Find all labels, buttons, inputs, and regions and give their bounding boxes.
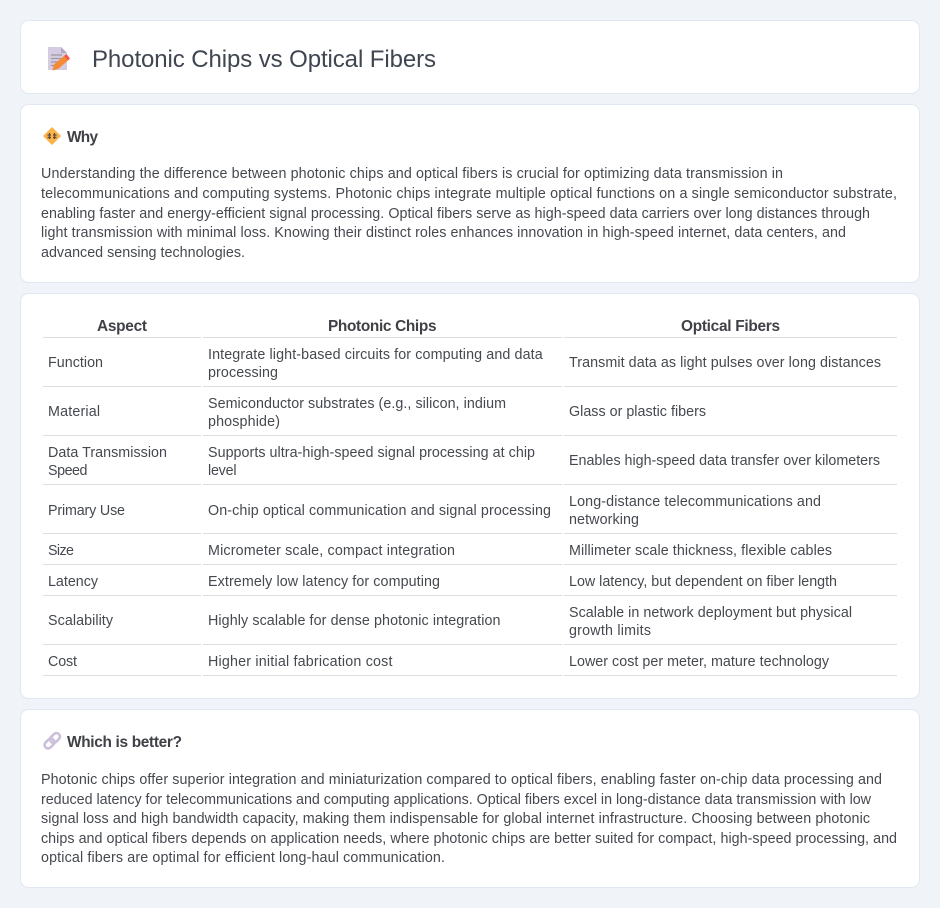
heading: why: Why (67, 129, 98, 146)
row: size (48, 543, 832, 559)
text block: which is better paragraph: chips and optical fibers depends on application needs, where photonic chips are better suited for compact, high-speed processing, and (41, 831, 897, 847)
row: material (48, 396, 706, 430)
text block: why paragraph: advanced sensing technologies. (41, 245, 245, 261)
row: material: phosphide) (208, 414, 280, 430)
row: data transmission speed: Supports ultra-high-speed signal processing at chip (208, 445, 535, 461)
panel: why (20, 104, 920, 282)
text block: which is better paragraph: reduced latency for telecommunications and computing applications. Optical fibers excel in long-distance data transmission with low (41, 792, 872, 808)
row: scalability (48, 605, 852, 639)
row: primary use: networking (569, 512, 639, 528)
text block: why paragraph: light transmission with minimal loss. Knowing their distinct roles enhances innovation in high-speed internet, data centers, and (41, 225, 846, 241)
row: latency: Extremely low latency for computing (208, 574, 440, 590)
text block: which is better paragraph: signal loss and high bandwidth capacity, making them indispensable for global internet infrastructure. Choosing between photonic (41, 811, 870, 827)
row: cost: Cost (48, 654, 77, 670)
panel: title header (20, 20, 920, 94)
icon: orange diamond (44, 128, 60, 144)
row: primary use: Long-distance telecommunications and (569, 494, 821, 510)
row: material: Glass or plastic fibers (569, 404, 706, 420)
text block: why paragraph: enabling faster and energy-efficient signal processing. Optical fibers serve as high-speed data carriers over long distances through (41, 206, 870, 222)
row: latency: Latency (48, 574, 99, 590)
text block: which is better paragraph: Photonic chips offer superior integration and miniaturization compared to optical fibers, enabling faster on-chip data processing and (41, 772, 882, 788)
row: function: Function (48, 355, 103, 371)
text block: which is better paragraph: optical fibers are optimal for efficient long-haul communication. (41, 850, 445, 866)
row: size: Micrometer scale, compact integration (208, 543, 455, 559)
row: data transmission speed (48, 445, 880, 479)
row: latency (48, 574, 837, 590)
row: size: Millimeter scale thickness, flexible cables (569, 543, 832, 559)
row: latency: Low latency, but dependent on fiber length (569, 574, 837, 590)
row: function: Transmit data as light pulses over long distances (569, 355, 881, 371)
row: primary use: On-chip optical communication and signal processing (208, 503, 551, 519)
row: data transmission speed: Speed (48, 463, 88, 479)
row: primary use: Primary Use (48, 503, 125, 519)
table header row: Photonic Chips (328, 318, 436, 335)
row: material: Material (48, 404, 100, 420)
row: function: Integrate light-based circuits for computing and data (208, 347, 543, 363)
text block: why paragraph: telecommunications and computing systems. Photonic chips integrate multiple optical functions on a single semiconductor substrate, (41, 186, 897, 202)
row: cost (48, 654, 830, 670)
table header row: Optical Fibers (681, 318, 780, 335)
row: cost: Lower cost per meter, mature technology (569, 654, 830, 670)
row: size: Size (48, 543, 74, 559)
row: data transmission speed: Enables high-speed data transfer over kilometers (569, 453, 880, 469)
row: scalability: Scalable in network deployment but physical (569, 605, 852, 621)
title: Photonic Chips vs Optical Fibers (92, 46, 436, 73)
row: function: processing (208, 365, 278, 381)
panel: which is better (20, 710, 920, 888)
heading: which is better: Which is better? (67, 734, 182, 751)
text block: which is better paragraph (41, 772, 897, 866)
row: material: Semiconductor substrates (e.g., silicon, indium (208, 396, 506, 412)
text block: why paragraph (41, 166, 897, 261)
icon: document with pencil (48, 47, 70, 70)
row: data transmission speed: level (208, 463, 236, 479)
row: cost: Higher initial fabrication cost (208, 654, 393, 670)
row: scalability: growth limits (569, 623, 651, 639)
row: primary use (48, 494, 821, 528)
text block: why paragraph: Understanding the difference between photonic chips and optical fibers is crucial for optimizing data transmission in (41, 166, 783, 182)
row: scalability: Scalability (48, 613, 114, 629)
table header row (97, 318, 780, 335)
row: data transmission speed: Data Transmission (48, 445, 167, 461)
row: function (48, 347, 881, 381)
panel: comparison table (20, 294, 920, 698)
icon: chain link (43, 732, 61, 750)
row: scalability: Highly scalable for dense photonic integration (208, 613, 501, 629)
table header row: Aspect (97, 318, 147, 335)
